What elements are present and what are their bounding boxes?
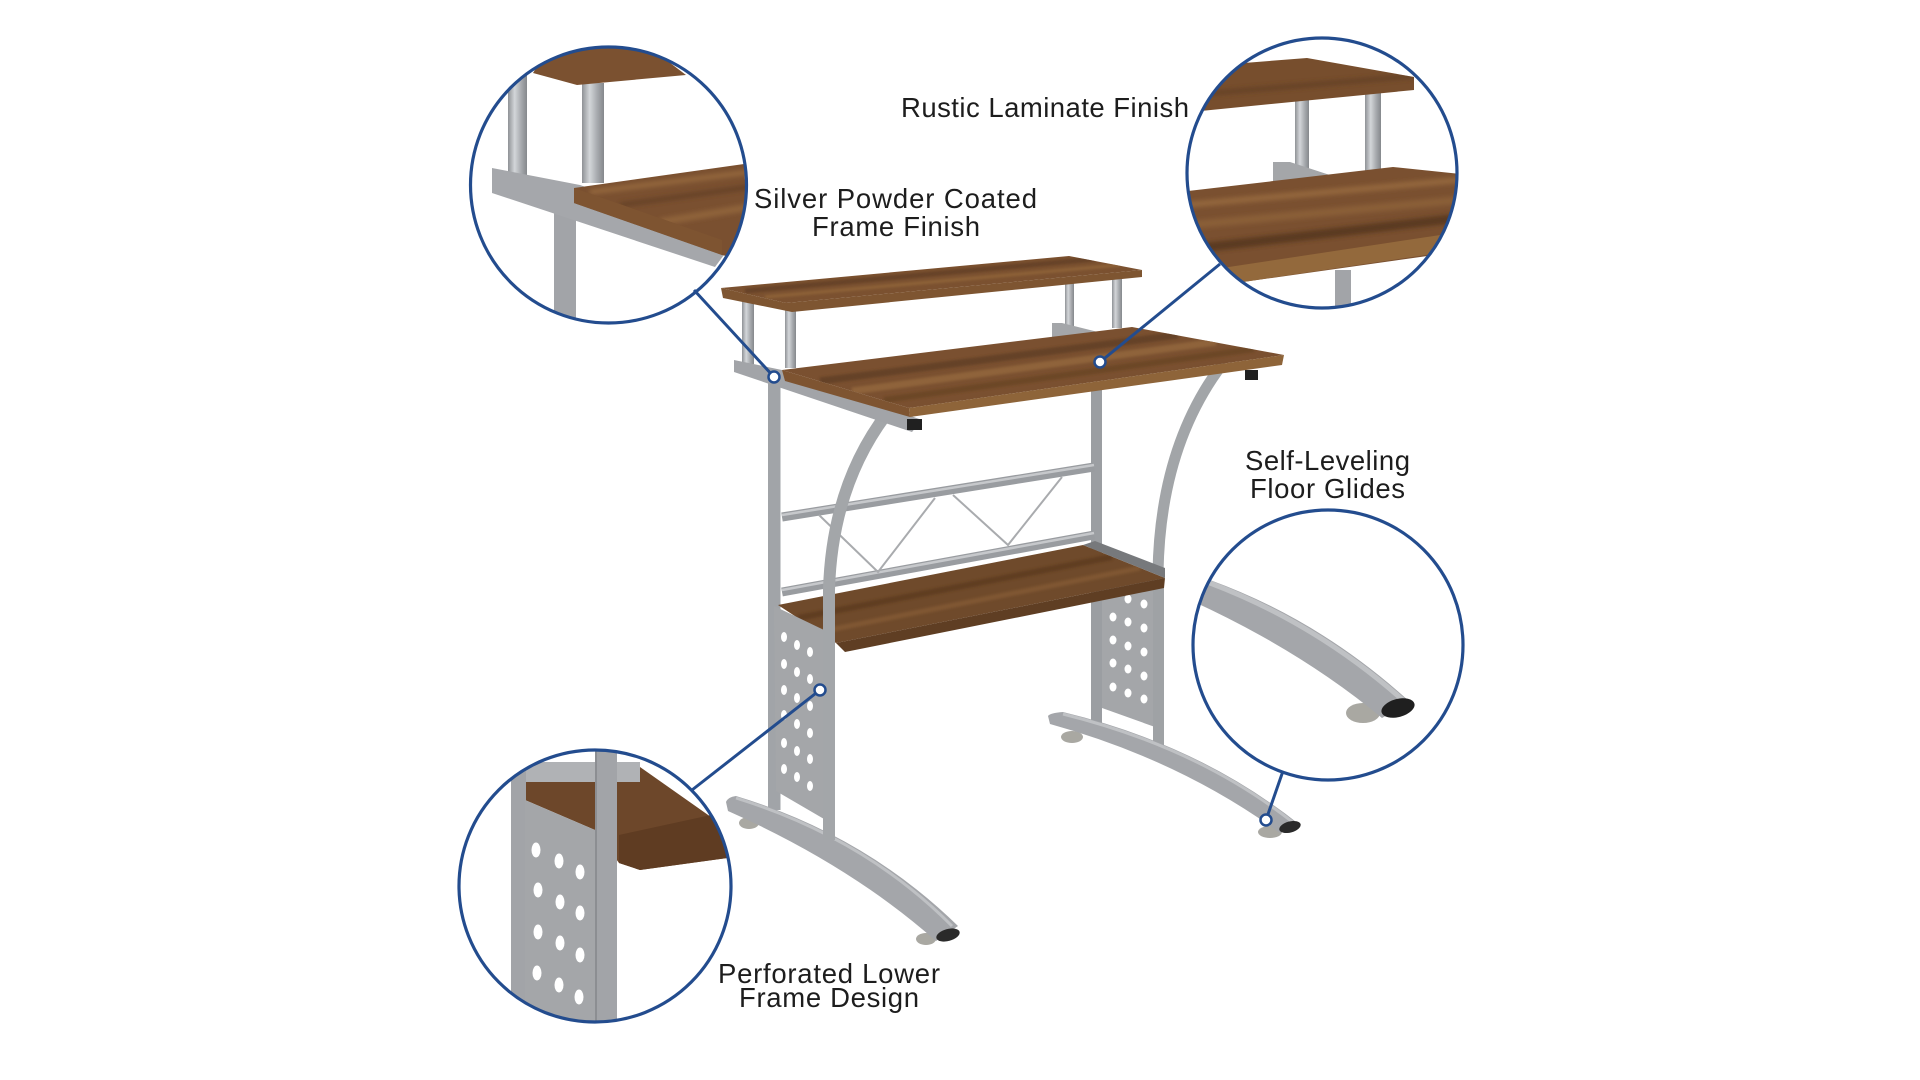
callout: rustic laminate: [1094, 38, 1470, 368]
label: self-leveling glides: Floor Glides: [1250, 473, 1405, 504]
label: perforated lower frame: Frame Design: [739, 982, 919, 1013]
callout: perforated lower frame: [459, 684, 826, 1030]
label: silver powder coated: [754, 183, 1037, 242]
ring: [1193, 510, 1463, 780]
zoom detail: perforated panel: [511, 745, 735, 1030]
metal support bar: [734, 360, 922, 432]
left perforated panel: [774, 606, 824, 819]
anchor dot: [1260, 814, 1272, 826]
desktop glides: [907, 370, 1258, 430]
zoom detail: desktop surface: [1180, 58, 1470, 310]
product diagram: [457, 36, 1465, 1024]
ring: [470, 47, 746, 323]
ring: [459, 750, 731, 1022]
anchor dot: [814, 684, 826, 696]
ring: [1187, 38, 1457, 308]
label: silver powder coated: Silver Powder Coated: [754, 183, 1037, 214]
label: self-leveling glides: [1245, 445, 1410, 504]
rear right leg and panel: [1091, 385, 1164, 748]
shelf posts: [742, 276, 1122, 368]
label: perforated lower frame: Perforated Lower: [718, 958, 940, 989]
label: rustic laminate: Rustic Laminate Finish: [901, 92, 1189, 123]
rails and wire brace: [782, 465, 1094, 592]
label: silver powder coated: Frame Finish: [812, 211, 980, 242]
zoom detail: frame corner: [492, 48, 745, 318]
anchor dot: [768, 372, 780, 382]
desk: [721, 256, 1302, 945]
callout: silver powder coated frame: [470, 30, 780, 382]
label: perforated lower frame: [718, 958, 940, 1013]
callout: floor glides: [1190, 510, 1463, 826]
left vertical post: [768, 372, 780, 810]
label: self-leveling glides: Self-Leveling: [1245, 445, 1410, 476]
top shelf: [721, 256, 1142, 312]
right arched leg: [1158, 362, 1224, 573]
zoom detail: floor foot: [1190, 575, 1417, 723]
left floor foot: [726, 796, 961, 945]
desktop: [782, 327, 1284, 417]
lower shelf: [778, 541, 1165, 652]
anchor dot: [1094, 356, 1106, 368]
left arched leg: [829, 412, 888, 840]
right floor foot: [1048, 712, 1302, 838]
